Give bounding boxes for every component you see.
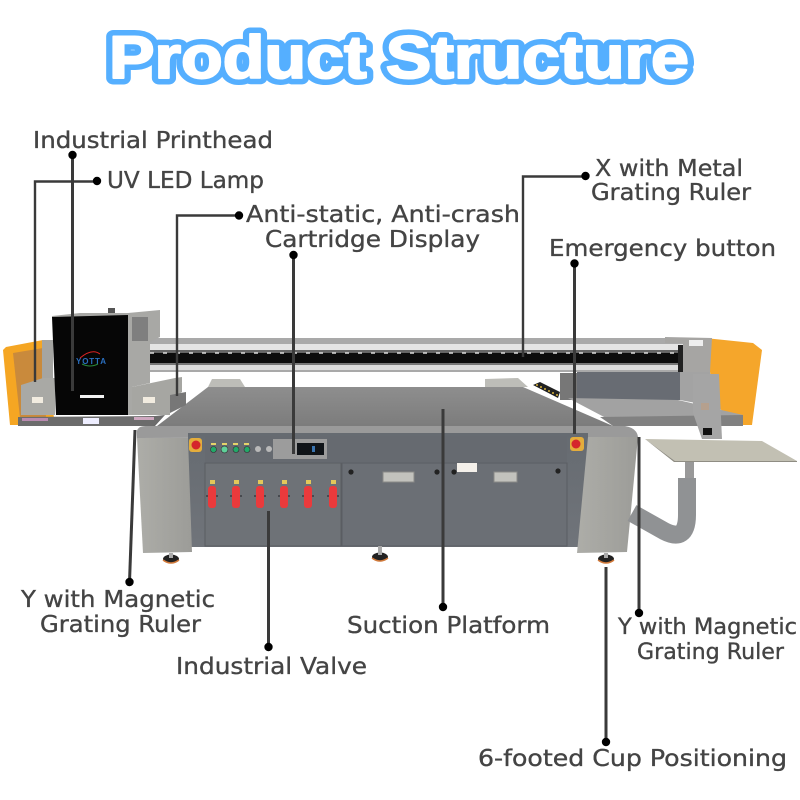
label: UV LED Lamp: UV LED Lamp xyxy=(107,168,264,194)
feet xyxy=(163,546,614,564)
label: Y with Magnetic Grating Ruler right: Grating Ruler xyxy=(637,640,785,665)
label: Anti-static, Anti-crash: Anti-static, Anti-crash xyxy=(246,202,520,228)
left pillar xyxy=(137,438,192,553)
title: Product Structure xyxy=(109,24,689,91)
right orange side panel xyxy=(705,338,762,425)
label: Y with Magnetic Grating Ruler right xyxy=(617,437,797,665)
door locks xyxy=(348,468,561,475)
keyboard arm xyxy=(632,461,694,535)
label: Emergency button xyxy=(549,236,776,434)
label: X with Metal Grating Ruler: X with Metal xyxy=(595,156,743,182)
gantry beam with grating ruler xyxy=(150,338,685,372)
label: Anti-static, Anti-crash xyxy=(177,202,520,396)
carriage rear column xyxy=(42,340,53,380)
printer machine xyxy=(3,308,797,564)
carriage black cover xyxy=(52,315,128,415)
label: 6-footed Cup Positioning xyxy=(478,567,787,772)
label: Y with Magnetic Grating Ruler left: Grating Ruler xyxy=(40,612,202,638)
label: Y with Magnetic Grating Ruler left: Y with Magnetic xyxy=(20,587,215,613)
cable chain xyxy=(533,382,560,398)
right emergency button xyxy=(570,437,584,451)
label: UV LED Lamp xyxy=(35,168,264,382)
drawer door xyxy=(342,463,567,546)
label: Cartridge Display xyxy=(265,227,480,454)
carriage grey side xyxy=(128,311,160,415)
label: Y with Magnetic Grating Ruler right: Y with Magnetic xyxy=(617,615,797,640)
label: X with Metal Grating Ruler: Grating Ruler xyxy=(591,180,752,206)
label: 6-footed Cup Positioning: 6-footed Cup Positioning xyxy=(478,746,787,772)
front console xyxy=(188,433,588,547)
suction platform xyxy=(157,387,613,426)
label: Suction Platform: Suction Platform xyxy=(347,613,550,639)
red valves xyxy=(206,480,339,508)
label: Industrial Valve: Industrial Valve xyxy=(176,654,367,680)
right gantry end block xyxy=(560,337,717,407)
monitor bracket xyxy=(693,374,722,439)
YOTTA logo: YOTTA xyxy=(76,357,106,366)
right pillar xyxy=(577,437,638,553)
label: Y with Magnetic Grating Ruler left xyxy=(20,430,215,638)
label: Emergency button: Emergency button xyxy=(549,236,776,262)
label: Suction Platform xyxy=(347,409,550,639)
carriage knob xyxy=(108,308,115,314)
drawer handles xyxy=(383,472,517,482)
label: X with Metal Grating Ruler xyxy=(523,156,752,357)
carriage base strip xyxy=(18,415,165,426)
warning label xyxy=(457,463,477,472)
valve door xyxy=(205,463,341,546)
keyboard tray xyxy=(645,439,797,462)
label: Industrial Printhead: Industrial Printhead xyxy=(33,128,273,154)
label: Industrial Valve xyxy=(176,511,367,680)
carriage top edge xyxy=(52,310,160,318)
title: Product Structure xyxy=(109,24,689,91)
left emergency button xyxy=(189,438,202,452)
display unit xyxy=(273,439,327,459)
front top rim xyxy=(137,426,638,438)
platform tabs xyxy=(208,378,528,387)
left orange side panel xyxy=(3,340,55,425)
carriage left box xyxy=(21,378,55,415)
status lights xyxy=(210,443,272,453)
label: Industrial Printhead xyxy=(33,128,273,391)
carriage right box xyxy=(132,377,186,415)
vent grille xyxy=(132,317,148,341)
print carriage xyxy=(18,308,186,426)
label: Cartridge Display: Cartridge Display xyxy=(265,227,480,253)
right tray shelf xyxy=(568,398,743,426)
